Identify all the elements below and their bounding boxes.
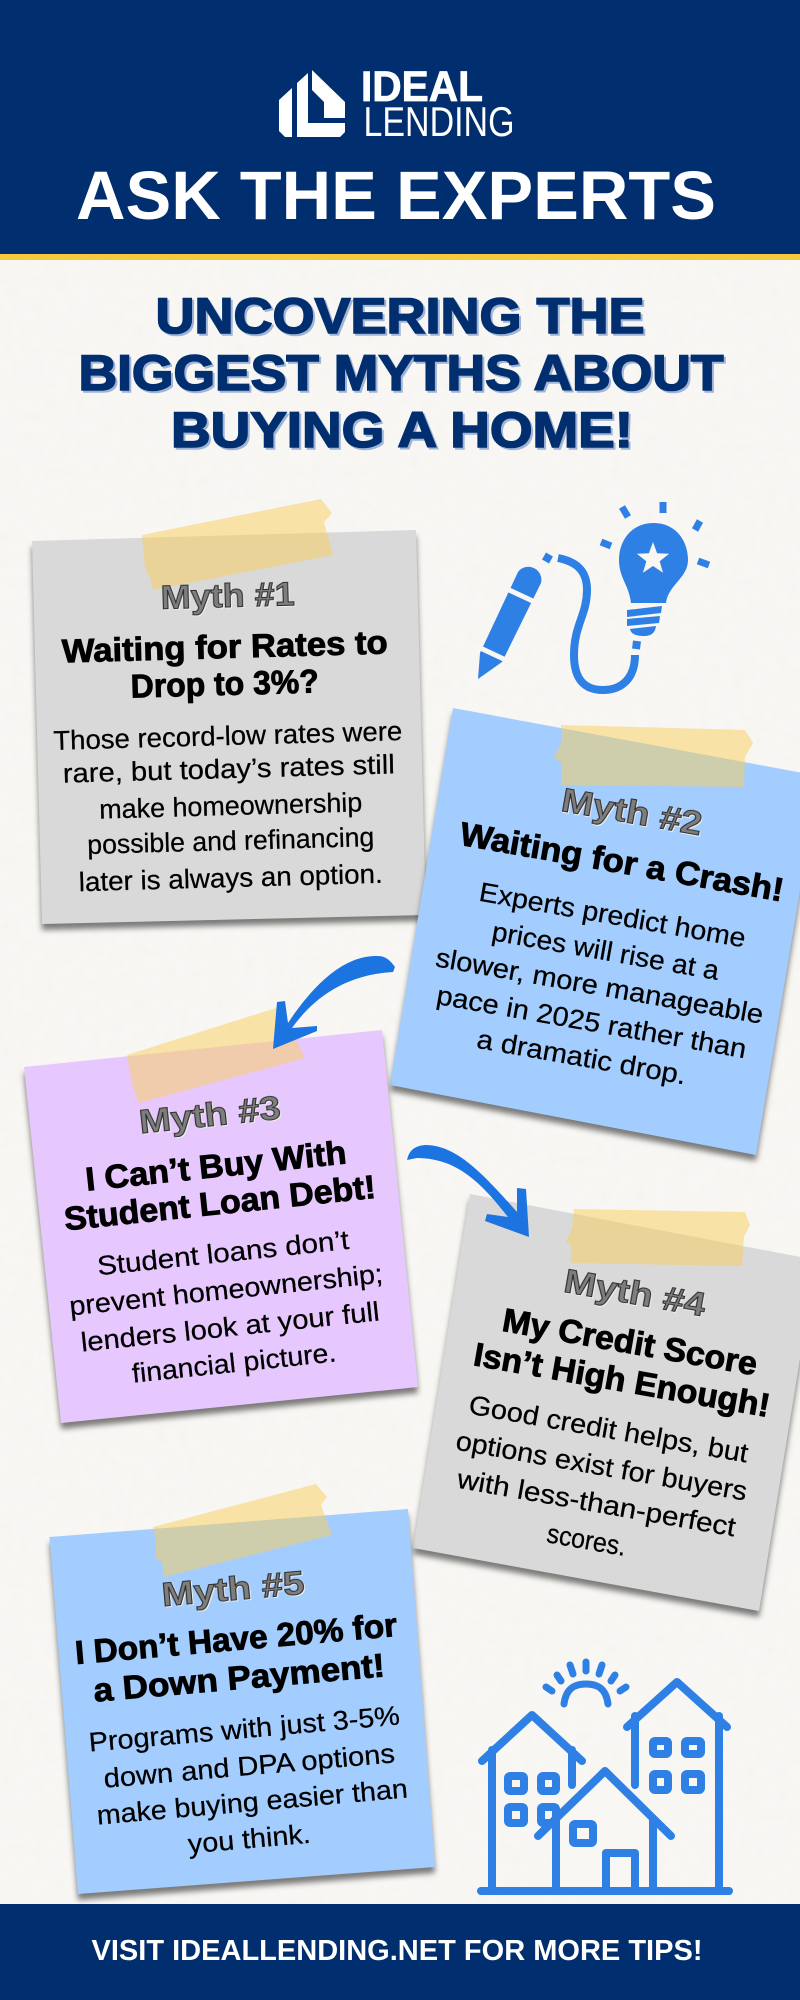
icon: ground line (481, 1887, 729, 1895)
myth body: possible and refinancing (87, 822, 375, 860)
myth title: Isn’t High Enough! (471, 1335, 773, 1424)
myth body: Student loans don’t (96, 1225, 351, 1281)
arrow: myth 2 to myth 3 (273, 956, 395, 1049)
myth body (53, 716, 403, 897)
myth title: My Credit Score (500, 1301, 760, 1382)
main heading: UNCOVERING THE (156, 288, 644, 344)
myth label: Myth #3 (137, 1089, 282, 1140)
header band (0, 0, 800, 260)
tape (142, 499, 333, 590)
myth title (471, 1301, 773, 1424)
main heading: BIGGEST MYTHS ABOUT (78, 345, 724, 401)
panel: myth 4 (413, 1194, 800, 1611)
myth body: Programs with just 3-5% (88, 1700, 401, 1758)
arrow: myth 3 to myth 4 (407, 1145, 529, 1237)
myth title: a Down Payment! (92, 1646, 386, 1709)
icon: left house (482, 1715, 582, 1888)
myth label: Myth #1 (160, 575, 295, 616)
myth body: scores. (545, 1518, 629, 1562)
myth title: I Can’t Buy With (84, 1133, 348, 1198)
myth body: financial picture. (131, 1337, 338, 1389)
myth title: Waiting for a Crash! (457, 815, 787, 908)
note paper (413, 1194, 800, 1611)
logo wordmark: LENDING (364, 98, 514, 145)
panel: myth 2 (390, 708, 800, 1155)
myth label: Myth #2 (559, 781, 705, 842)
tape (127, 1008, 305, 1103)
panel: myth 3 (24, 1008, 418, 1423)
myth title (61, 623, 388, 705)
icon: wire (544, 556, 637, 690)
panel: myth 5 (50, 1484, 435, 1894)
footer band (0, 1904, 800, 2000)
icon: houses and sun (481, 1662, 729, 1891)
main heading (78, 288, 724, 458)
tape (554, 725, 753, 787)
myth body: rare, but today’s rates still (62, 749, 395, 789)
myth body: Good credit helps, but (467, 1390, 751, 1469)
icon: front house (538, 1768, 672, 1888)
myth body: make homeownership (99, 787, 363, 825)
myth body: Those record-low rates were (53, 716, 403, 756)
myth body: you think. (187, 1819, 312, 1859)
icon: tall house (627, 1682, 727, 1888)
myth title: Drop to 3%? (130, 662, 319, 705)
logo wordmark: IDEAL (361, 63, 483, 111)
note paper (32, 530, 426, 924)
myth body (68, 1225, 384, 1389)
myth body: prices will rise at a (490, 916, 722, 986)
tape (566, 1209, 750, 1266)
logo wordmark (361, 63, 514, 145)
logo mark (279, 70, 345, 137)
myth body: slower, more manageable (433, 943, 766, 1030)
myth body (454, 1390, 751, 1562)
tape (153, 1484, 332, 1577)
icon: light bulb (601, 502, 709, 636)
myth body (88, 1700, 409, 1859)
header title: ASK THE EXPERTS (76, 157, 716, 234)
myth body: Experts predict home (477, 877, 748, 953)
main heading: BUYING A HOME! (171, 402, 633, 458)
footer text: VISIT IDEALLENDING.NET FOR MORE TIPS! (92, 1935, 702, 1967)
icon: pencil and light bulb (476, 502, 709, 690)
myth body: lenders look at your full (79, 1296, 381, 1358)
note paper (24, 1030, 418, 1423)
myth title: Student Loan Debt! (62, 1168, 377, 1237)
myth body: down and DPA options (102, 1738, 396, 1794)
myth body: make buying easier than (96, 1773, 409, 1831)
myth title: I Don’t Have 20% for (73, 1606, 399, 1671)
logo (279, 63, 514, 145)
myth body: later is always an option. (78, 859, 383, 897)
myth label: Myth #4 (561, 1262, 709, 1323)
myth body: pace in 2025 rather than (434, 980, 749, 1064)
icon: pencil (476, 567, 541, 679)
myth label: Myth #5 (160, 1564, 306, 1613)
note paper (50, 1509, 435, 1894)
myth body: prevent homeownership; (68, 1259, 384, 1321)
panel: myth 1 (32, 499, 426, 924)
note paper (390, 708, 800, 1155)
myth title (62, 1133, 377, 1237)
icon: sun (546, 1662, 626, 1704)
myth body (433, 877, 766, 1090)
myth body: a dramatic drop. (475, 1024, 689, 1090)
myth title (73, 1606, 399, 1709)
myth body: options exist for buyers (454, 1426, 749, 1507)
myth title: Waiting for Rates to (61, 623, 388, 670)
myth body: with less-than-perfect (454, 1464, 739, 1542)
